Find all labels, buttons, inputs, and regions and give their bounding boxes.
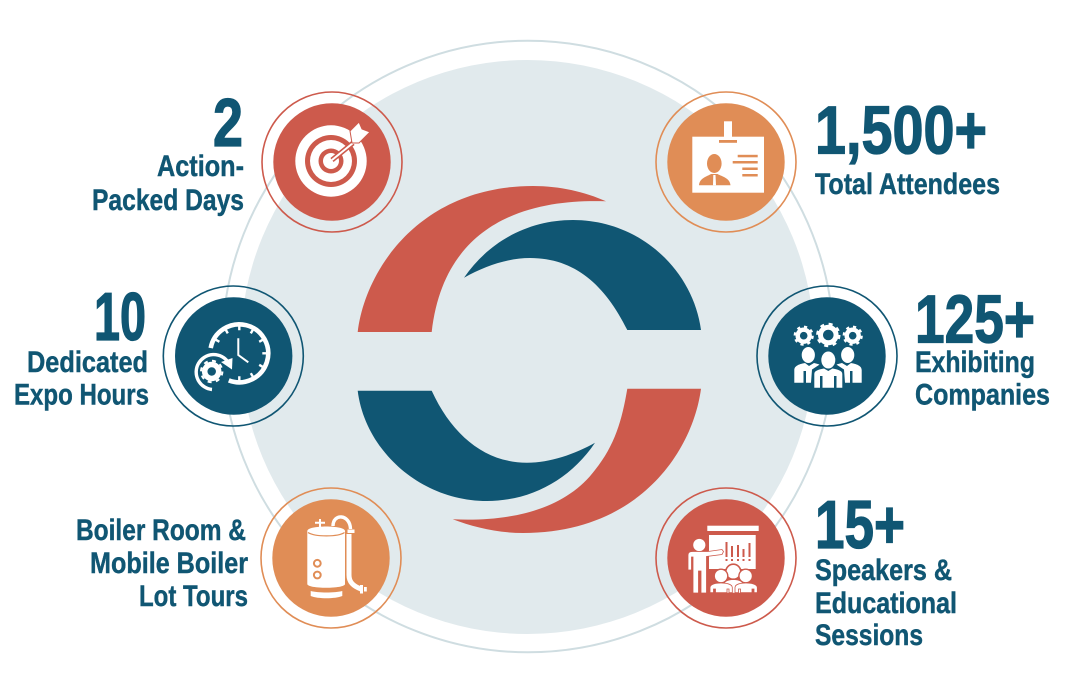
icon: presenter with audience (656, 488, 796, 628)
stat: 125+: 125+ (915, 282, 1035, 358)
panel: speakers and educational sessions (656, 487, 957, 652)
icon: target with arrow (262, 92, 402, 232)
panel: action-packed days (92, 85, 402, 232)
label: speakers and educational sessions: Educational (815, 587, 957, 620)
icon: clock and gear (163, 286, 303, 426)
stat: 2: 2 (213, 85, 243, 161)
stat: 1,500+: 1,500+ (815, 92, 987, 168)
label: speakers and educational sessions: Speakers & (815, 554, 952, 587)
panel: exhibiting companies (757, 282, 1050, 426)
panel: dedicated expo hours (14, 279, 303, 426)
panel: total attendees (656, 92, 1000, 232)
label: boiler room and mobile boiler lot tours: Boiler Room & (76, 514, 246, 547)
label: dedicated expo hours: Dedicated (27, 346, 148, 379)
icon: boiler (261, 488, 401, 628)
label: boiler room and mobile boiler lot tours (76, 514, 248, 613)
label: speakers and educational sessions: Sessions (815, 619, 923, 652)
icon: team with gears (757, 286, 897, 426)
label: action-packed days (92, 150, 244, 217)
label: boiler room and mobile boiler lot tours: Lot Tours (139, 580, 248, 613)
stat: 15+: 15+ (815, 487, 905, 563)
label: exhibiting companies: Exhibiting (915, 346, 1035, 379)
label: boiler room and mobile boiler lot tours: Mobile Boiler (90, 547, 248, 580)
central logo swooshes (358, 186, 701, 533)
label: exhibiting companies (915, 346, 1050, 412)
panel: boiler room tours (76, 488, 401, 628)
label: action-packed days: Action- (157, 150, 244, 183)
icon: name badge (656, 92, 796, 232)
background circle (222, 41, 834, 652)
label: total attendees: Total Attendees (815, 168, 1000, 201)
stat: 10: 10 (94, 279, 146, 355)
label: speakers and educational sessions (815, 554, 957, 652)
label: dedicated expo hours: Expo Hours (14, 378, 149, 412)
label: action-packed days: Packed Days (92, 184, 244, 217)
label: dedicated expo hours (14, 346, 149, 412)
